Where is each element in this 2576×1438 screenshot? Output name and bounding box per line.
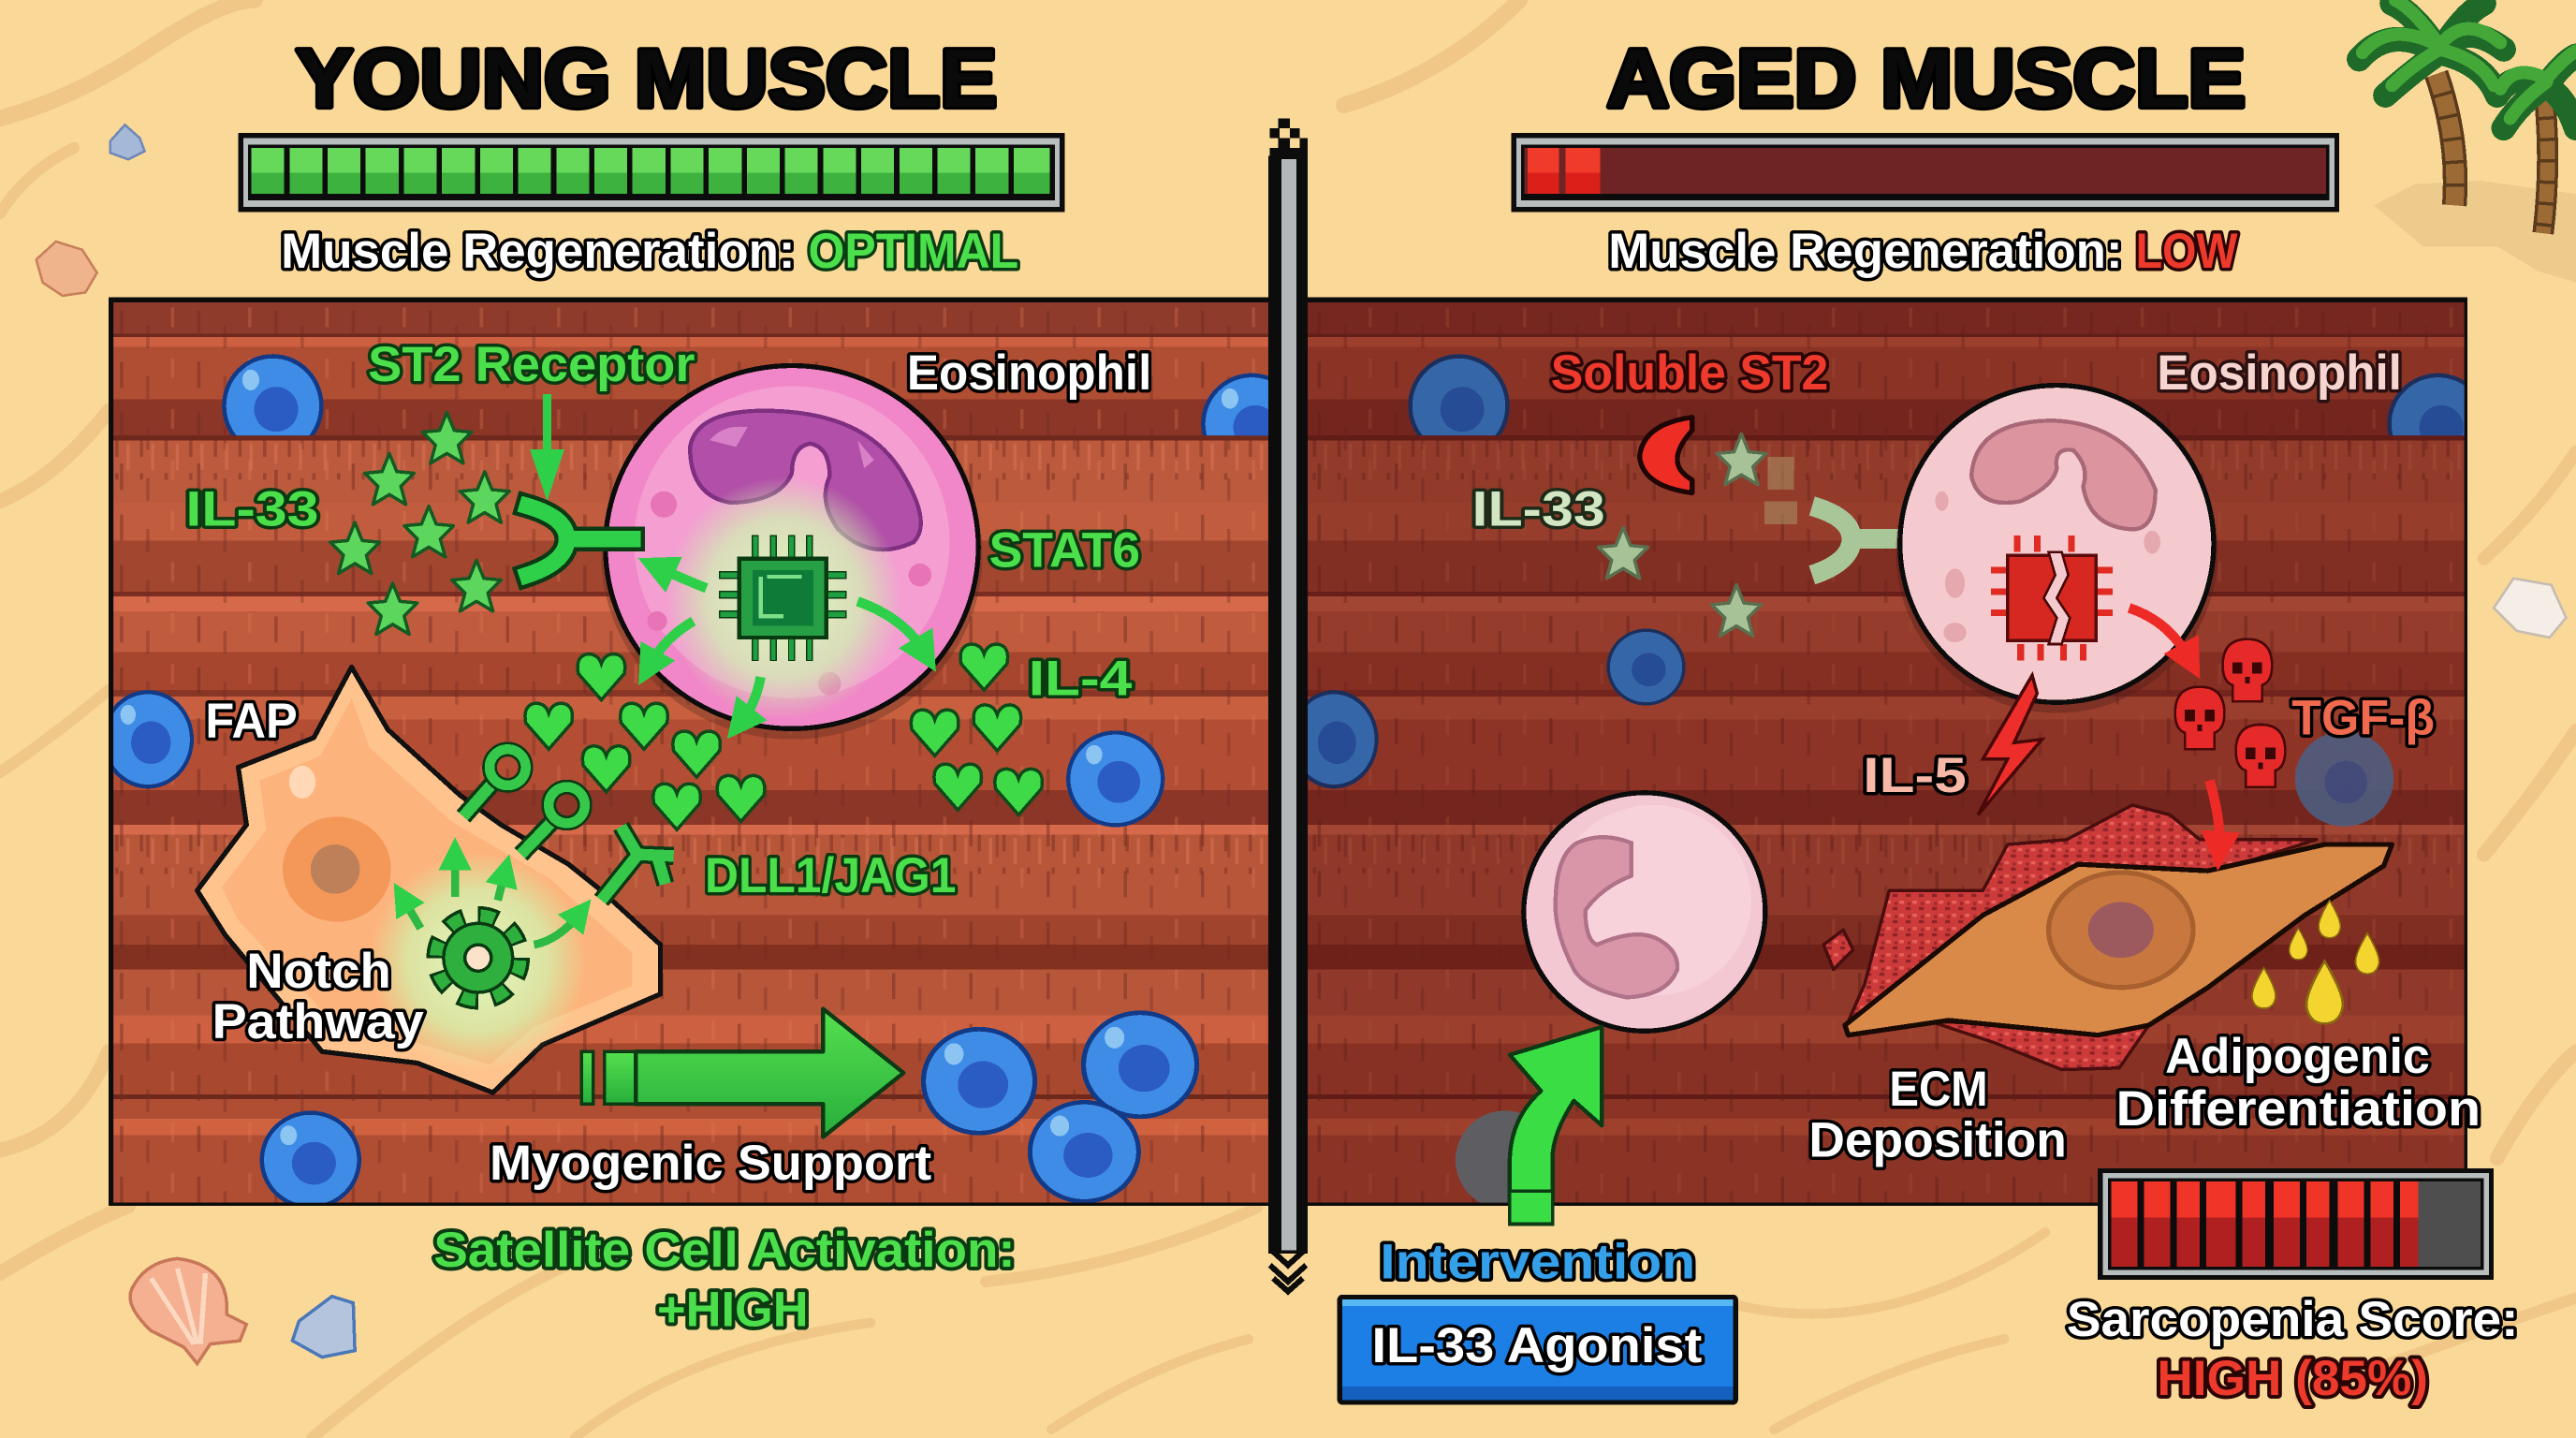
divider [1268,118,1308,1291]
glow [376,859,579,1063]
status: muscle regeneration optimal: Muscle Regeneration: [281,224,795,279]
label: Notch Pathway: Pathway [212,994,424,1049]
button: IL-33 Agonist: IL-33 Agonist [1372,1318,1702,1373]
satellite cell top right [2387,373,2465,436]
label: Eosinophil aged: Eosinophil [2157,345,2402,401]
fibroblast cell [1845,844,2392,1035]
grey cell bottom [1456,1110,1520,1203]
gauge: sarcopenia score [2098,1168,2494,1280]
arrow: myogenic support [581,1009,903,1137]
status: muscle regeneration optimal: OPTIMAL [809,224,1018,279]
icon: orange shell [37,242,97,296]
label: Eosinophil: Eosinophil [907,345,1151,401]
status: satellite cell activation: Satellite Cell Activation: [433,1223,1016,1278]
label: Intervention: Intervention [1380,1234,1695,1289]
nucleus [283,816,391,922]
satellite cell bottom [260,1110,361,1210]
label: ECM Deposition: Deposition [1808,1113,2067,1168]
label: STAT6: STAT6 [989,522,1140,578]
arrow stem: intervention overlap [1510,1191,1553,1224]
nucleus [1556,837,1677,997]
icon: broken STAT6 chip [1991,536,2113,661]
icon: scallop shell [130,1258,246,1364]
status: muscle regeneration optimal [281,224,1018,279]
icon: blue-grey shell [292,1297,355,1357]
faded fragments [1764,457,1797,524]
DLL1/JAG1 ligands [463,749,674,901]
FAP cell [198,668,661,1093]
satellite cell centre [1606,628,1686,706]
label: DLL1/JAG1: DLL1/JAG1 [705,848,956,903]
satellite cell cluster [921,1010,1199,1204]
icon: pale blue pebble [110,125,145,159]
label: IL-5: IL-5 [1863,748,1967,803]
icon: ST2 receptor [527,506,633,575]
status: muscle regeneration low: LOW [2136,224,2238,279]
satellite cell top right [1201,373,1268,436]
label: ECM Deposition: ECM [1889,1062,1988,1117]
status: sarcopenia score: HIGH (85%) [2157,1351,2428,1406]
arrow: TGF-β to fibroblast [2210,781,2219,846]
label: ECM Deposition [1808,1062,2067,1168]
satellite cell left edge [113,690,194,788]
label: Myogenic Support: Myogenic Support [490,1136,931,1191]
arrow: to TGF-β [2130,608,2188,657]
eosinophil: aged [1895,383,2217,713]
label: IL-4: IL-4 [1029,651,1132,706]
label: Adipogenic Differentiation [2116,1029,2481,1137]
progress bar: young muscle regeneration [239,133,1064,212]
panel: aged muscle tissue [1290,298,2489,1224]
label: IL-33 aged: IL-33 [1472,482,1605,537]
label: IL-33: IL-33 [185,482,319,537]
satellite cell top left [222,354,324,436]
satellite cell top left [1408,354,1509,436]
icon: white shell [2494,579,2566,638]
IL-33 stars [330,413,509,634]
label: Adipogenic Differentiation: Differentiation [2116,1081,2481,1137]
glow [666,477,902,720]
notch arrows [404,858,578,945]
TGF-β skulls [2175,639,2285,787]
panel: young muscle tissue [102,298,1303,1210]
IL-4 hearts [525,644,1042,829]
ECM deposition [1823,805,2317,1070]
progress bar: aged muscle regeneration [1512,133,2339,212]
satellite cell right [1066,730,1164,827]
title: young muscle: YOUNG MUSCLE [296,33,997,125]
button: IL-33 Agonist [1338,1295,1738,1405]
icon: IL-5 lightning [1978,675,2042,814]
label: Soluble ST2: Soluble ST2 [1551,345,1828,401]
IL-33 faded stars [1599,433,1766,636]
arrow: intervention [1510,1027,1602,1224]
satellite cell left edge [1308,690,1378,788]
label: ST2 Receptor: ST2 Receptor [368,337,695,392]
icon: palm trees [2359,0,2576,283]
status: sarcopenia score [2067,1292,2519,1406]
title: aged muscle: AGED MUSCLE [1606,33,2246,125]
grey satellite cell [2295,731,2393,827]
label: FAP: FAP [205,694,298,749]
status: muscle regeneration low: Muscle Regeneration: [1608,224,2123,279]
status: satellite cell activation: +HIGH [657,1282,809,1337]
nucleus [1971,420,2156,529]
status: sarcopenia score: Sarcopenia Score: [2067,1292,2519,1347]
adipogenic droplets [2252,901,2379,1023]
nucleus [690,411,921,550]
icon: soluble ST2 crescent [1640,418,1692,493]
eosinophil: restored [1521,790,1767,1034]
eosinophil: young [601,363,983,740]
icon: STAT6 chip [720,536,846,661]
arrow: to ST2 receptor [535,394,559,488]
icon: faded ST2 receptor [1812,506,1925,575]
icon: Notch gear [439,918,518,997]
status: satellite cell activation [433,1223,1016,1337]
arrows from chip [651,568,923,720]
label: Notch Pathway: Notch [246,944,391,999]
label: Notch Pathway [212,944,424,1049]
label: Adipogenic Differentiation: Adipogenic [2165,1029,2430,1084]
label: TGF-β: TGF-β [2291,690,2435,745]
